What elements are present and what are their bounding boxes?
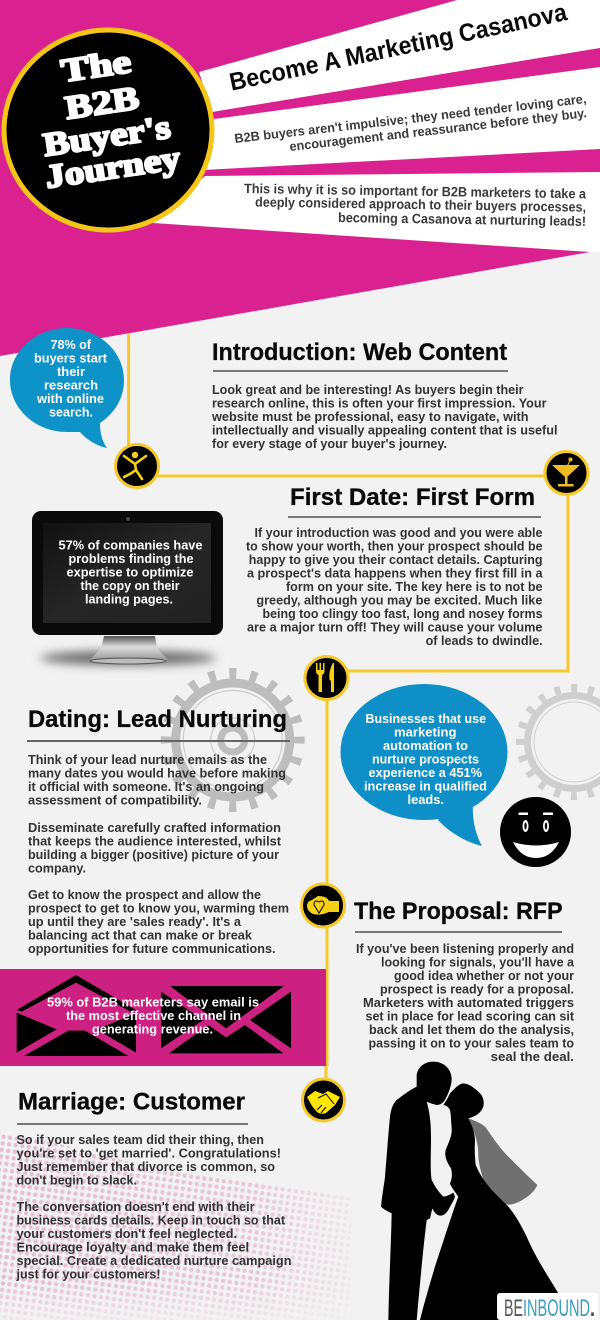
body text: First Date xyxy=(246,525,543,648)
header text: why it matters: deeply considered approach to their buyers processes, xyxy=(255,195,586,215)
body text: The Proposal: looking for signals, you'll have a xyxy=(381,954,575,970)
body text: Introduction: Look great and be interesting! As buyers begin their xyxy=(212,382,524,397)
panel: email statistic band xyxy=(0,969,326,1066)
title: Journey xyxy=(43,140,183,196)
title: B2B xyxy=(63,80,141,127)
veil xyxy=(468,1118,537,1205)
bubble: 78% of buyers: search. xyxy=(49,404,93,420)
statistic: 57% of companies: problems finding the xyxy=(68,551,194,566)
body text: Dating: it official with someone. It's an ongoing xyxy=(28,779,264,794)
body text: The Proposal xyxy=(356,941,575,1064)
logo: BeInbound xyxy=(497,1293,598,1320)
underline xyxy=(17,1123,248,1125)
icon: closed envelope xyxy=(161,986,291,1053)
bubble: 78% of buyers: their xyxy=(57,364,85,379)
body text: First Date: greedy, although you may be excited. Much like xyxy=(256,592,542,608)
body text: First Date: are a major turn off! They will cause your volume xyxy=(247,620,542,634)
underline xyxy=(213,370,508,372)
panel: Dating xyxy=(27,706,290,956)
body text: Dating: building a bigger (positive) picture of your xyxy=(28,847,279,862)
heading: The Proposal: The Proposal: RFP xyxy=(354,898,563,925)
icon: martini glass xyxy=(545,452,588,494)
gear: right side xyxy=(520,688,600,796)
bubble: 78% of buyers: with online xyxy=(36,391,104,406)
icon: smiley face xyxy=(500,797,571,867)
body text: Marriage: The conversation doesn't end with their xyxy=(16,1199,254,1214)
body text: The Proposal: back and let them do the analysis, xyxy=(369,1022,574,1037)
body text: Dating: Think of your lead nurture emails as the xyxy=(28,752,267,767)
statistic: 57% of companies: expertise to optimize xyxy=(66,564,194,580)
body text: The Proposal: set in place for lead scoring can sit xyxy=(366,1008,575,1024)
journey connector line xyxy=(129,334,568,1100)
title badge xyxy=(4,30,212,230)
body text: Marriage: business cards details. Keep in touch so that xyxy=(16,1212,286,1228)
header text: why it matters: This is why it is so important for B2B marketers to take a xyxy=(244,181,587,201)
body text: Dating: up until they are 'sales ready'. It's a xyxy=(28,914,242,929)
body text: Marriage: don't begin to slack. xyxy=(16,1172,137,1188)
panel: Marriage xyxy=(16,1088,292,1282)
body text: First Date: a prospect's data happens when they first fill in a xyxy=(247,566,543,580)
body text: Marriage: Just remember that divorce is common, so xyxy=(16,1159,275,1174)
panel: Introduction xyxy=(211,339,558,451)
body text: Introduction: research online, this is often your first impression. Your xyxy=(212,396,546,410)
statistic: 57% of companies: the copy on their xyxy=(80,578,180,593)
gear: behind Dating section xyxy=(166,674,299,806)
body text: Marriage xyxy=(16,1132,292,1282)
body text: The Proposal: seal the deal. xyxy=(491,1049,574,1064)
title: Buyer's xyxy=(41,110,173,164)
body text: Marriage: just for your customers! xyxy=(16,1266,161,1282)
body text: Dating xyxy=(28,752,289,956)
statistic: 59% of B2B marketers: 59% of B2B marketers say email is xyxy=(47,994,259,1010)
underline xyxy=(355,931,562,933)
body text: The Proposal: prospect is ready for a proposal. xyxy=(380,982,574,996)
body text: Dating: assessment of compatibility. xyxy=(28,792,202,808)
statistic: 59% of B2B marketers xyxy=(47,994,259,1036)
icon: open envelope xyxy=(17,975,136,1056)
bride xyxy=(420,1083,575,1320)
monitor with statistic xyxy=(32,511,223,665)
groom xyxy=(381,1062,455,1320)
icon: handshake xyxy=(302,1079,344,1121)
panel: The Proposal xyxy=(354,898,575,1064)
body text: Introduction: website must be professional, easy to navigate, with xyxy=(211,409,529,424)
body text: The Proposal: Marketers with automated triggers xyxy=(363,995,574,1010)
heading: Dating: Dating: Lead Nurturing xyxy=(28,706,287,733)
body text: Marriage: your customers don't feel neglected. xyxy=(16,1226,237,1241)
underline xyxy=(27,740,290,742)
body text: Dating: that keeps the audience interested, whilst xyxy=(28,834,282,848)
body text: First Date: form on your site. The key here is to not be xyxy=(286,579,542,594)
title: The xyxy=(59,44,133,90)
icon: knife and fork xyxy=(305,656,348,700)
body text: The Proposal: good idea whether or not your xyxy=(394,968,574,983)
title xyxy=(41,44,183,196)
bubble: marketing automation: Businesses that use xyxy=(366,711,486,726)
body text: The Proposal: If you've been listening properly and xyxy=(356,941,574,956)
underline xyxy=(288,516,541,518)
body text: Dating: Disseminate carefully crafted information xyxy=(28,820,281,835)
body text: Marriage: So if your sales team did their thing, then xyxy=(16,1132,264,1147)
body text: Dating: balancing act that can make or break xyxy=(28,928,253,942)
body text: Marriage: special. Create a dedicated nurture campaign xyxy=(16,1253,292,1268)
icon: hand with heart xyxy=(302,884,344,927)
body text: Dating: Get to know the prospect and allow the xyxy=(28,887,261,902)
header text: B2B buyers: B2B buyers aren't impulsive; they need tender loving care, xyxy=(234,91,587,146)
bubble: 78% of buyers xyxy=(10,328,124,448)
bubble: 78% of buyers: buyers start xyxy=(34,350,108,366)
statistic: 57% of companies: landing pages. xyxy=(85,592,173,606)
bubble: marketing automation: increase in qualified xyxy=(364,778,487,794)
bubble: marketing automation xyxy=(340,684,508,846)
icon: jumping person xyxy=(116,444,158,488)
header text: why it matters xyxy=(244,181,587,229)
heading: Marriage: Marriage: Customer xyxy=(18,1088,245,1116)
body text: Marriage: Encourage loyalty and make them feel xyxy=(16,1240,249,1254)
body text: Dating: prospect to get to know you, warming them xyxy=(28,900,289,916)
header: magenta sunburst with white rays xyxy=(0,0,600,356)
body text: Introduction: for every stage of your buyer's journey. xyxy=(212,436,447,451)
body text: Introduction: intellectually and visually appealing content that is useful xyxy=(212,422,558,438)
illustration: kissing couple silhouette xyxy=(381,1062,575,1320)
body text: Dating: company. xyxy=(28,860,86,876)
halftone dots: Marriage section xyxy=(0,1132,352,1320)
body text: Dating: many dates you would have before making xyxy=(28,766,286,780)
statistic: 57% of companies: 57% of companies have xyxy=(58,538,202,552)
bubble: marketing automation: marketing xyxy=(394,724,457,740)
bubble: marketing automation: leads. xyxy=(408,792,444,807)
body text: Introduction xyxy=(211,382,558,451)
bubble: marketing automation: experience a 451% xyxy=(368,765,482,780)
bubble: 78% of buyers: research xyxy=(44,378,98,392)
bubble: 78% of buyers: 78% of xyxy=(50,337,92,352)
header text: why it matters: becoming a Casanova at nurturing leads! xyxy=(338,210,586,229)
heading: First Date: First Date: First Form xyxy=(290,484,535,511)
header text: B2B buyers: encouragement and reassurance before they buy. xyxy=(289,105,587,154)
statistic: 59% of B2B marketers: the most effective channel in xyxy=(66,1008,241,1023)
body text: Dating: opportunities for future communications. xyxy=(28,941,276,956)
statistic: 59% of B2B marketers: generating revenue. xyxy=(92,1022,213,1036)
body text: First Date: If your introduction was good and you were able xyxy=(254,525,542,540)
body text: First Date: of leads to dwindle. xyxy=(426,633,543,648)
bubble: marketing automation: automation to xyxy=(383,738,468,753)
body text: First Date: being too clingy too fast, long and nosey forms xyxy=(262,606,542,621)
body text: First Date: to show your worth, then your prospect should be xyxy=(246,538,542,554)
panel: First Date xyxy=(246,484,543,648)
bubble: marketing automation: nurture prospects xyxy=(372,752,479,766)
body text: The Proposal: passing it on to your sales team to xyxy=(368,1036,574,1050)
body text: First Date: happy to give you their contact details. Capturing xyxy=(249,552,543,567)
body text: Marriage: you're set to 'get married'. Congratulations! xyxy=(16,1146,281,1160)
statistic: 57% of companies xyxy=(58,538,202,606)
heading: Introduction: Introduction: Web Content xyxy=(212,339,507,366)
